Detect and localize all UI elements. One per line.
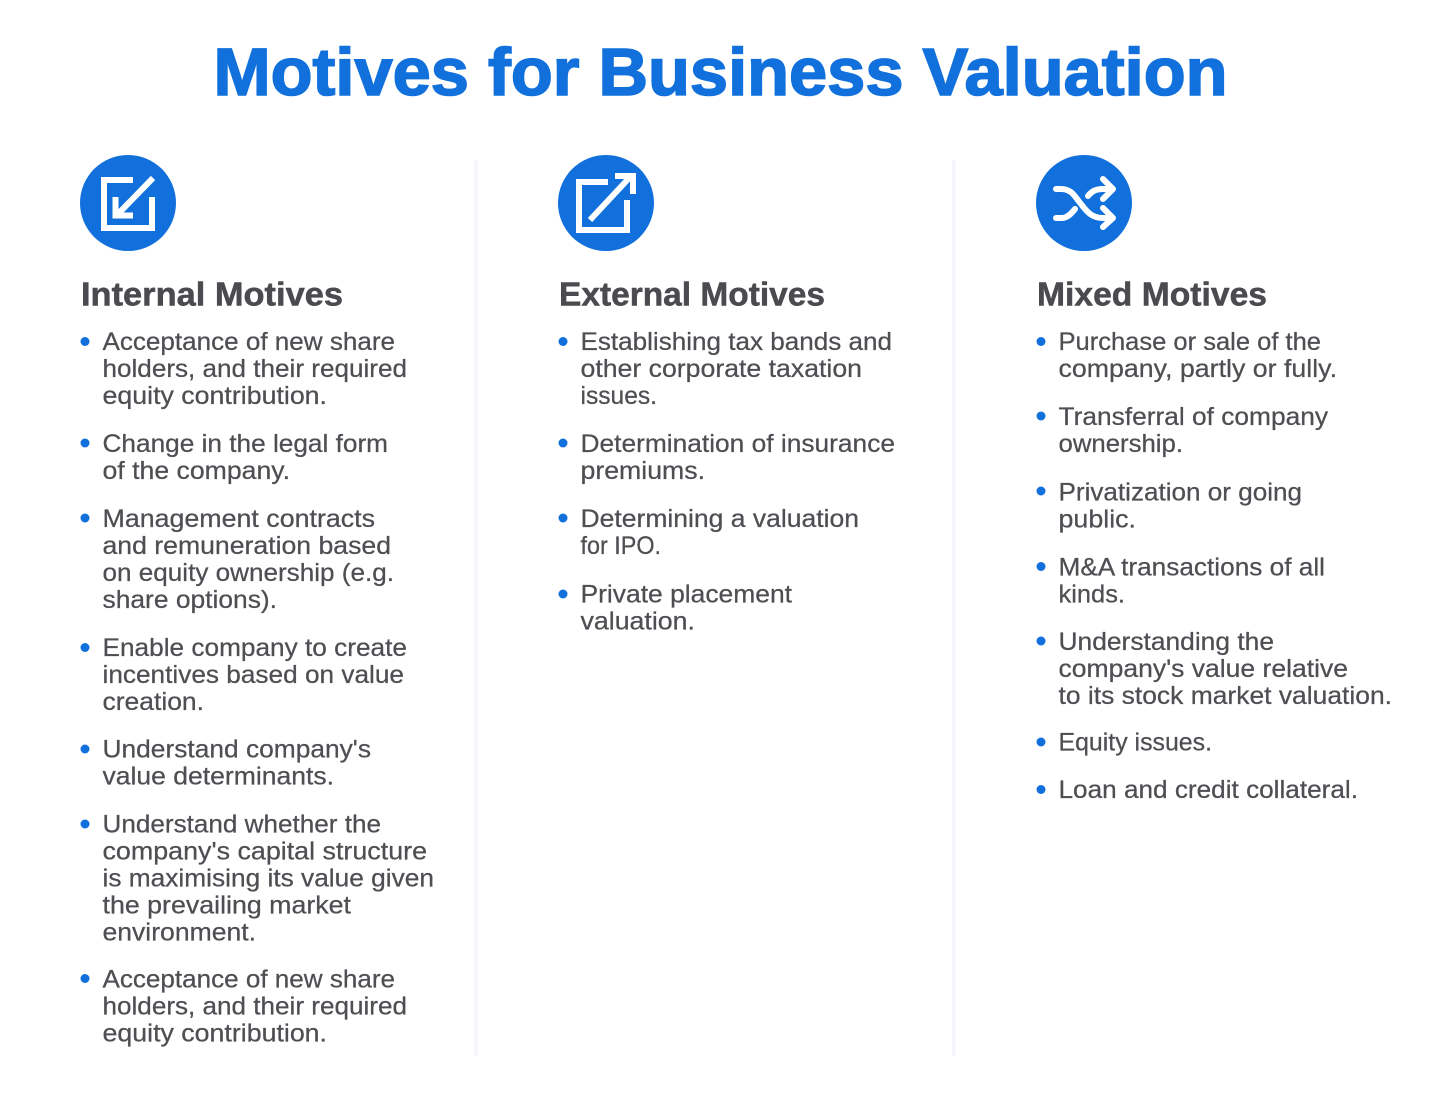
- list item: IPO valuation: for IPO.: [580, 532, 661, 560]
- list item: tax bands: [558, 328, 892, 410]
- list item: new share holders repeated: holders, and their required: [102, 992, 407, 1020]
- list item: new share holders repeated: [80, 966, 407, 1048]
- list item: value determinants: value determinants.: [102, 762, 334, 790]
- list item: incentives: Enable company to create: [102, 634, 407, 662]
- list item: management contracts: share options).: [102, 586, 277, 614]
- list item: new share holders repeated: equity contribution.: [102, 1020, 327, 1048]
- list item: new share holders: Acceptance of new share: [102, 328, 395, 356]
- list item: management contracts: Management contracts: [102, 505, 375, 533]
- list item: private placement: [558, 580, 792, 636]
- list item: new share holders: holders, and their required: [102, 355, 407, 383]
- icon: shuffle arrows: [1036, 155, 1132, 251]
- list item: transferral of ownership: [1036, 403, 1329, 458]
- list item: capital structure: environment.: [102, 918, 256, 946]
- list item: tax bands: issues.: [580, 382, 657, 410]
- list item: transferral of ownership: ownership.: [1058, 430, 1183, 458]
- icon: arrow out of box: [558, 155, 654, 251]
- list item: new share holders: equity contribution.: [102, 382, 327, 410]
- list item: transferral of ownership: Transferral of company: [1058, 403, 1329, 431]
- list item: legal form: [80, 430, 388, 485]
- list item: purchase or sale: company, partly or fully.: [1058, 355, 1337, 383]
- list item: new share holders repeated: Acceptance of new share: [102, 966, 395, 994]
- list item: M&A transactions: [1036, 554, 1325, 608]
- list item: privatization: Privatization or going: [1058, 478, 1302, 506]
- list item: privatization: [1036, 478, 1302, 534]
- list item: stock market valuation: to its stock market valuation.: [1058, 682, 1392, 710]
- list item: tax bands: other corporate taxation: [580, 355, 862, 383]
- list item: insurance premiums: Determination of insurance: [580, 430, 895, 458]
- list item: capital structure: is maximising its value given: [102, 864, 434, 892]
- heading: mixed motives: Mixed Motives: [1037, 276, 1267, 312]
- icon: arrow into box: [80, 155, 176, 251]
- list item: loan collateral: Loan and credit collateral.: [1058, 776, 1358, 804]
- list item: legal form: of the company.: [102, 457, 290, 485]
- list item: insurance premiums: premiums.: [580, 457, 705, 485]
- panel: external motives: [558, 155, 895, 636]
- list item: stock market valuation: company's value relative: [1058, 655, 1348, 683]
- panel: internal motives: [80, 155, 434, 1048]
- list item: capital structure: company's capital structure: [102, 838, 427, 866]
- list item: insurance premiums: [558, 430, 895, 485]
- list item: management contracts: and remuneration based: [102, 532, 391, 560]
- list item: management contracts: on equity ownership (e.g.: [102, 559, 394, 587]
- list item: incentives: incentives based on value: [102, 661, 404, 689]
- list item: M&A transactions: kinds.: [1058, 580, 1125, 608]
- list item: purchase or sale: Purchase or sale of the: [1058, 328, 1321, 356]
- list item: equity issues: Equity issues.: [1058, 728, 1212, 756]
- list item: capital structure: the prevailing market: [102, 892, 351, 920]
- list item: stock market valuation: [1036, 628, 1392, 710]
- list item: legal form: Change in the legal form: [102, 430, 388, 458]
- list item: privatization: public.: [1058, 506, 1136, 534]
- list item: stock market valuation: Understanding the: [1058, 628, 1274, 656]
- list item: M&A transactions: M&A transactions of all: [1058, 554, 1325, 582]
- list item: capital structure: [80, 810, 434, 946]
- list item: new share holders: [80, 328, 407, 410]
- list item: incentives: [80, 634, 407, 716]
- title: Motives for Business Valuation: [214, 35, 1228, 110]
- list item: purchase or sale: [1036, 328, 1337, 383]
- list item: private placement: Private placement: [580, 580, 792, 608]
- panel: mixed motives: [1036, 155, 1392, 804]
- heading: internal motives: Internal Motives: [81, 276, 343, 312]
- list item: value determinants: Understand company's: [102, 736, 371, 764]
- list item: capital structure: Understand whether the: [102, 810, 381, 838]
- list item: incentives: creation.: [102, 688, 204, 716]
- list item: management contracts: [80, 505, 394, 614]
- list item: value determinants: [80, 736, 371, 790]
- list item: private placement: valuation.: [580, 608, 695, 636]
- heading: external motives: External Motives: [559, 276, 825, 312]
- list item: IPO valuation: Determining a valuation: [580, 505, 859, 533]
- list item: IPO valuation: [558, 505, 859, 560]
- list item: tax bands: Establishing tax bands and: [580, 328, 892, 356]
